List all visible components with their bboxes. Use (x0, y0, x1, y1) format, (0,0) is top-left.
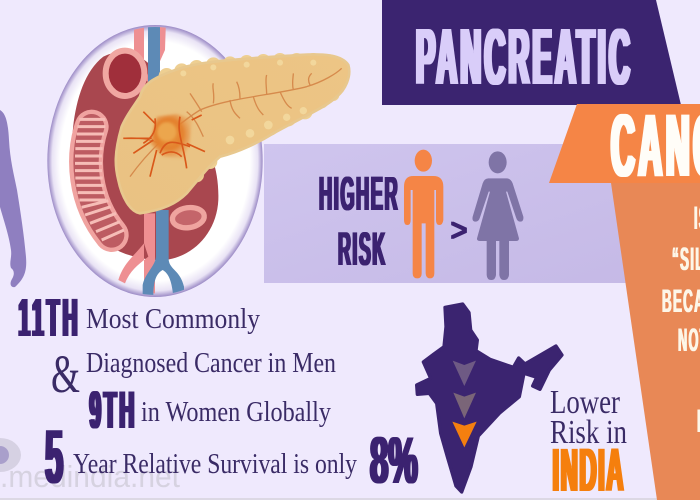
india map (417, 304, 562, 492)
branch artery top (146, 27, 166, 82)
icon: man and woman comparison (404, 150, 523, 280)
statistic: incidence ranking: 9TH (90, 381, 134, 440)
duodenum folds (75, 119, 124, 240)
icon: woman (472, 151, 523, 280)
arrow: faded middle (453, 393, 476, 418)
arrow: orange bottom (452, 422, 477, 447)
statistic: survival: Year Relative Survival is only (73, 448, 357, 480)
title banner: pancreatic (382, 0, 681, 105)
circle backdrop (47, 25, 263, 297)
anatomy clipped to circle (72, 20, 218, 297)
risk band background (264, 144, 662, 283)
kidney background (72, 52, 218, 260)
statistic: incidence ranking: Diagnosed Cancer in Men (86, 347, 336, 379)
silhouette figure (0, 110, 26, 287)
statistic: incidence ranking: & (51, 344, 80, 404)
higher risk label: HIGHER (319, 166, 398, 221)
pancreas body (116, 54, 349, 213)
statistic: incidence ranking: in Women Globally (141, 396, 331, 428)
duodenum lining (86, 127, 112, 235)
pancreas illustration (47, 20, 349, 297)
arrow: faded top (453, 361, 476, 386)
icon: man (404, 150, 443, 278)
tumour (123, 112, 205, 177)
pancreas lobules under edge (159, 53, 348, 206)
pancreatic duct (123, 68, 342, 177)
higher risk label: RISK (338, 223, 385, 276)
watermark (0, 438, 180, 494)
lower vessel ring (171, 206, 206, 230)
title banner: cancer (549, 96, 700, 196)
statistic: survival: 5 (45, 415, 63, 500)
lower risk in india label: Risk in (550, 414, 627, 451)
title banner: pancreatic: PANCREATIC (416, 12, 630, 101)
watermark: .medindia.net (0, 459, 180, 494)
statistic: incidence ranking (18, 287, 336, 440)
greater-than sign: > (451, 212, 467, 248)
statistic: incidence ranking: Most Commonly (86, 303, 260, 335)
pink artery (118, 20, 155, 293)
upper vessel ring (106, 51, 144, 96)
lower risk in india label (550, 384, 627, 500)
pancreas lobule highlights (180, 60, 316, 144)
lower risk in india label: Lower (550, 384, 621, 421)
higher risk label (319, 166, 398, 276)
statistic: survival (45, 415, 418, 500)
blue vein (143, 20, 184, 297)
statistic: incidence ranking: 11TH (18, 287, 77, 348)
side panel: silent cancer text (611, 183, 700, 500)
statistic: survival: 8% (370, 425, 418, 498)
duodenum loop (86, 127, 112, 235)
